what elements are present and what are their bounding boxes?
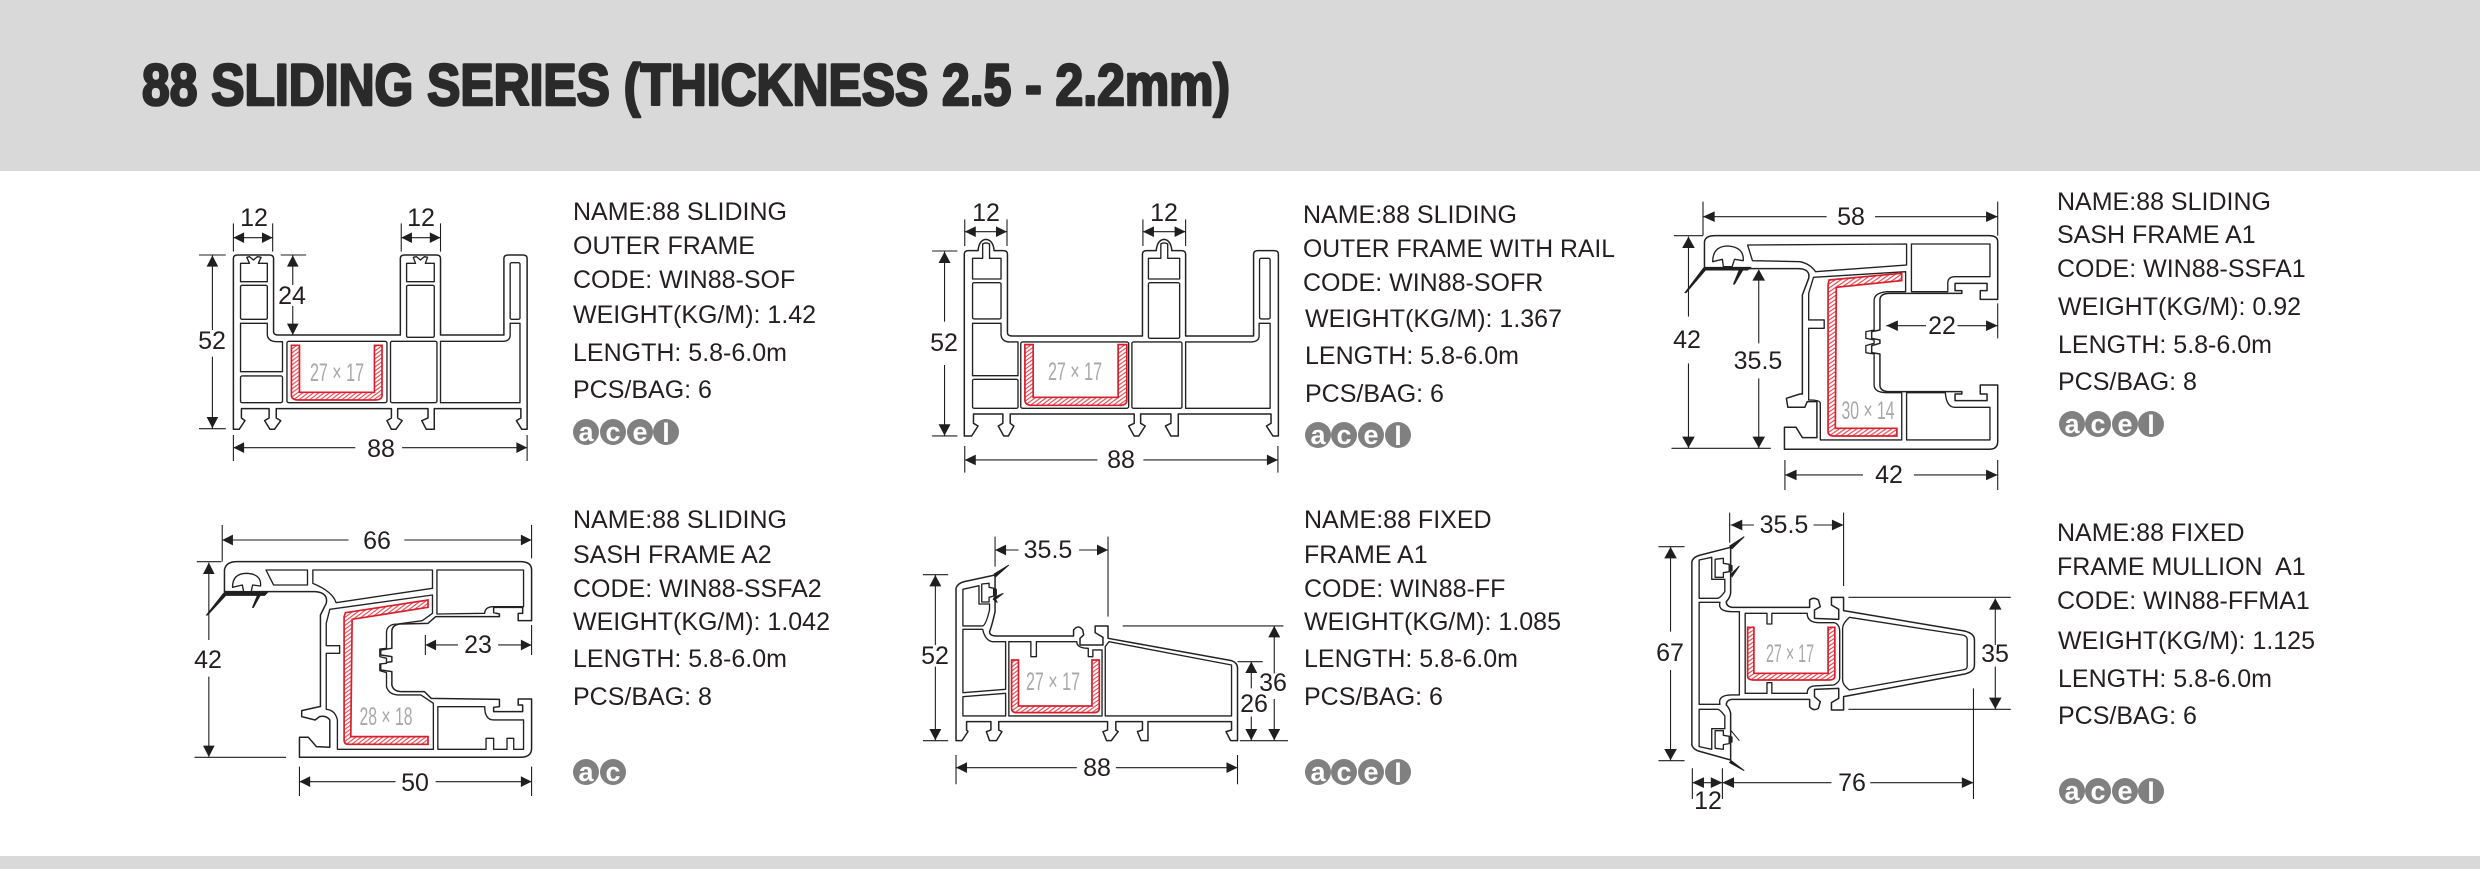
dimensions: 88 (1107, 446, 1135, 474)
badges: a c (573, 757, 626, 787)
specifications text: WEIGHT(KG/M): 1.42 (573, 301, 816, 329)
badges: a c e l (2059, 776, 2164, 807)
specifications text: NAME:88 SLIDING (1303, 201, 1517, 229)
dimensions (921, 536, 1288, 784)
specifications text: LENGTH: 5.8-6.0m (1304, 645, 1518, 673)
badges: a c e l: a (1310, 757, 1326, 787)
specifications text: CODE: WIN88-FFMA1 (2057, 587, 2310, 615)
dimensions (194, 525, 532, 797)
badges: a c e l: c (2090, 776, 2106, 806)
dimensions: 24 (278, 282, 306, 310)
specifications text: PCS/BAG: 8 (2058, 368, 2197, 396)
badges: a c e l: a (2064, 776, 2080, 806)
specifications text: LENGTH: 5.8-6.0m (2058, 331, 2272, 359)
dimensions: 35.5 (1760, 511, 1808, 539)
dimensions: 23 (464, 631, 492, 659)
dimensions: 35.5 (1734, 347, 1782, 375)
specifications text: SASH FRAME A1 (2057, 221, 2256, 249)
dimensions: 58 (1837, 203, 1865, 231)
steel size label: 27 × 17 (1026, 668, 1080, 696)
specifications text: SASH FRAME A2 (573, 541, 772, 569)
dimensions: 12 (407, 204, 435, 232)
specifications text: WEIGHT(KG/M): 1.085 (1304, 608, 1561, 636)
panel: sash frame A2 (194, 506, 830, 797)
dimensions: 52 (930, 329, 958, 357)
gasket (1713, 246, 1743, 267)
dimensions: 88 (367, 435, 395, 463)
gasket (232, 573, 261, 592)
specifications text: WEIGHT(KG/M): 1.367 (1305, 305, 1562, 333)
specifications text: NAME:88 SLIDING (573, 506, 787, 534)
header band (0, 0, 2480, 171)
specifications text: CODE: WIN88-SOFR (1303, 269, 1543, 297)
dimensions: 52 (198, 327, 226, 355)
badges: a c e l: l (2147, 410, 2155, 440)
dimensions: 42 (1673, 326, 1701, 354)
specifications text (1304, 506, 1561, 711)
steel reinforcement (344, 600, 428, 744)
specifications text: NAME:88 SLIDING (2057, 188, 2271, 216)
specifications text: NAME:88 FIXED (1304, 506, 1492, 534)
dimensions: 42 (1875, 461, 1903, 489)
profile: fixed frame A1 cross-section (956, 565, 1238, 741)
dimensions (198, 204, 527, 463)
specifications text: LENGTH: 5.8-6.0m (573, 645, 787, 673)
dimensions: 36 (1259, 669, 1287, 697)
profile: sash frame A1 cross-section (1685, 236, 1998, 449)
badges: a c: a (578, 757, 594, 787)
badges: a c e l: e (2117, 776, 2133, 806)
dimensions: 76 (1838, 769, 1866, 797)
dimensions: 35 (1981, 640, 2009, 668)
badges: a c e l: e (1363, 757, 1379, 787)
specifications text: WEIGHT(KG/M): 0.92 (2058, 293, 2301, 321)
dimensions: 42 (194, 646, 222, 674)
panel: fixed frame mullion A1 (1656, 511, 2315, 815)
specifications text (573, 198, 816, 404)
badges: a c e l (573, 417, 679, 448)
gaskets (1730, 537, 1744, 771)
badges: a c e l: a (1310, 420, 1326, 450)
badges: a c e l: c (605, 417, 621, 447)
title: 88 SLIDING SERIES (THICKNESS 2.5 - 2.2mm) (142, 53, 1230, 118)
badges: a c e l: c (1336, 757, 1352, 787)
badges: a c e l: c (2090, 409, 2106, 439)
specifications text: LENGTH: 5.8-6.0m (573, 339, 787, 367)
dimensions: 12 (972, 199, 1000, 227)
profile: fixed frame mullion A1 cross-section (1692, 537, 1974, 771)
dimensions: 67 (1656, 639, 1684, 667)
badges: a c e l: e (1363, 420, 1379, 450)
dimensions: 26 (1240, 690, 1268, 718)
panel: outer frame (198, 198, 816, 463)
specifications text: FRAME MULLION A1 (2057, 553, 2306, 581)
panel: fixed frame A1 (921, 506, 1561, 788)
dimensions: 52 (921, 642, 949, 670)
dimensions: 66 (363, 527, 391, 555)
gasket (993, 565, 1009, 603)
specifications text: FRAME A1 (1304, 541, 1428, 569)
badges: a c e l (1305, 420, 1411, 451)
badges: a c e l: l (1394, 421, 1402, 451)
profile: sash frame A2 cross-section (207, 562, 532, 757)
steel reinforcement (1828, 273, 1902, 436)
dimensions: 35.5 (1024, 536, 1072, 564)
specifications text: LENGTH: 5.8-6.0m (2058, 665, 2272, 693)
badges: a c e l: c (1336, 420, 1352, 450)
specifications text (573, 506, 830, 711)
steel size label: 30 × 14 (1842, 397, 1895, 425)
specifications text: CODE: WIN88-SOF (573, 266, 795, 294)
dimensions: 88 (1083, 754, 1111, 782)
steel size label: 27 × 17 (1766, 640, 1814, 668)
dimensions: 12 (240, 204, 268, 232)
panel: sash frame A1 (1672, 188, 2306, 490)
steel size label: 27 × 17 (1048, 358, 1102, 386)
badges: a c e l: l (1394, 758, 1402, 788)
steel size label: 27 × 17 (310, 359, 364, 387)
dimensions (1656, 511, 2011, 815)
badges: a c e l (1305, 757, 1411, 788)
specifications text (2057, 519, 2315, 730)
steel reinforcement (1012, 660, 1099, 713)
specifications text: CODE: WIN88-SSFA1 (2057, 255, 2306, 283)
profile: outer frame cross-section (233, 255, 527, 429)
dimensions: 50 (401, 769, 429, 797)
specifications text: PCS/BAG: 8 (573, 683, 712, 711)
steel reinforcement (291, 345, 382, 400)
specifications text: NAME:88 FIXED (2057, 519, 2245, 547)
footer band (0, 856, 2480, 869)
badges: a c e l: a (2064, 409, 2080, 439)
steel reinforcement (1748, 627, 1835, 680)
badges: a c e l (2059, 409, 2164, 440)
specifications text: PCS/BAG: 6 (1304, 683, 1443, 711)
specifications text (1303, 201, 1615, 408)
specifications text: PCS/BAG: 6 (1305, 380, 1444, 408)
specifications text: WEIGHT(KG/M): 1.125 (2058, 627, 2315, 655)
specifications text: OUTER FRAME (573, 232, 755, 260)
badges: a c e l: e (632, 417, 648, 447)
badges: a c e l: e (2117, 409, 2133, 439)
dimensions: 22 (1928, 312, 1956, 340)
specifications text: CODE: WIN88-FF (1304, 575, 1505, 603)
dimensions: 12 (1150, 199, 1178, 227)
profile: outer frame with rail cross-section (964, 239, 1278, 436)
badges: a c e l: l (662, 418, 670, 448)
specifications text (2057, 188, 2306, 396)
dimensions (930, 199, 1278, 474)
badges: a c e l: a (578, 417, 594, 447)
specifications text: PCS/BAG: 6 (573, 376, 712, 404)
specifications text: NAME:88 SLIDING (573, 198, 787, 226)
steel size label: 28 × 18 (360, 703, 412, 731)
dimensions (1672, 202, 1998, 490)
specifications text: PCS/BAG: 6 (2058, 702, 2197, 730)
panel: outer frame with rail (930, 199, 1615, 474)
specifications text: CODE: WIN88-SSFA2 (573, 575, 822, 603)
specifications text: LENGTH: 5.8-6.0m (1305, 342, 1519, 370)
badges: a c: c (605, 757, 621, 787)
badges: a c e l: l (2147, 777, 2155, 807)
dimensions: 12 (1694, 787, 1722, 815)
steel reinforcement (1025, 345, 1127, 405)
specifications text: WEIGHT(KG/M): 1.042 (573, 608, 830, 636)
specifications text: OUTER FRAME WITH RAIL (1303, 235, 1615, 263)
